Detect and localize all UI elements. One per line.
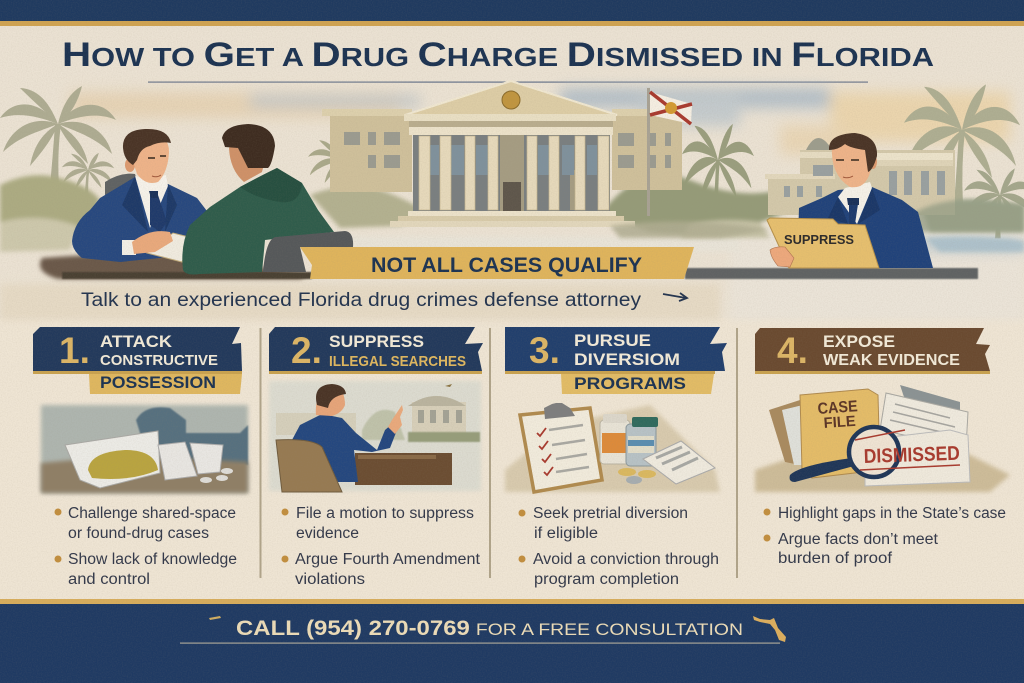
banner: POSSESSION [100,373,216,392]
folder [767,218,879,268]
subheading with arrow: Talk to an experienced Florida drug crimes defense attorney [81,290,642,311]
bullet text: Highlight gaps in the State’s case [778,505,1006,522]
bullet text: evidence [296,525,359,542]
bullet text: or found-drug cases [68,525,209,542]
banner: CONSTRUCTIVE [100,352,218,369]
call to action: CALL (954) 270-0769 FOR A FREE CONSULTATION [236,617,743,640]
bullet text: File a motion to suppress [296,505,474,522]
bullet text: burden of proof [778,550,893,567]
panel 4: expose weak evidence [755,328,1010,567]
banner: ATTACK [100,332,173,351]
banner: WEAK EVIDENCE [823,352,960,369]
banner: 4. [777,330,808,371]
bullet text: Show lack of knowledge [68,551,237,568]
background bushes right [910,199,1024,232]
attorney holding suppress folder [767,133,933,268]
bullet text: Argue Fourth Amendment [295,551,481,568]
illustration: case file and dismissed stamp: CASE [817,398,858,418]
flag [647,88,692,216]
hero scene [0,81,1024,279]
scenery wash [70,88,1024,250]
banner: DIVERSIOM [574,350,680,369]
client hoodie [182,168,334,274]
bullet text [518,505,719,588]
folder label: SUPPRESS [784,232,854,247]
banner: SUPPRESS [329,332,424,351]
banner: 1. [59,330,90,371]
illustration: case file and dismissed stamp [755,385,1010,492]
bullet text [764,505,1006,567]
bullet text: and control [68,571,150,588]
attorney hand and notepad [147,233,193,262]
banner: 2. [291,330,322,371]
bullet text: Avoid a conviction through [533,551,719,568]
portico [413,135,610,211]
ribbon: not all cases qualify: NOT ALL CASES QUALIFY [371,254,642,277]
icon: Florida outline [753,616,786,642]
panel 2: suppress illegal searches [269,327,483,588]
bushes [0,175,1024,252]
banner: ILLEGAL SEARCHES [329,353,466,370]
bullet text: Argue facts don’t meet [778,531,939,548]
bullet text [282,505,481,588]
attorney meeting client [72,124,353,274]
bullet text: violations [295,571,365,588]
illustration: attorney pointing at court [269,381,481,492]
palm trees [0,84,1024,238]
bullet text: Challenge shared-space [68,505,236,522]
top navy band [0,0,1024,26]
ribbon: not all cases qualify [300,247,694,279]
chair back [105,174,140,195]
illustration: checklist and medication [505,403,720,492]
wings [330,110,412,192]
left desk [40,254,308,279]
bullet text [54,505,237,588]
banner [269,327,483,374]
distant capitol [765,138,955,215]
illustration: case file and dismissed stamp: FILE [823,413,856,432]
bullet text: program completion [534,571,679,588]
panel 3: pursue diversion programs [505,327,727,588]
bullet text: if eligible [534,525,598,542]
footer band [0,599,1024,683]
panel 1: attack constructive possession [33,327,248,588]
banner: PURSUE [574,331,651,350]
banner: 3. [529,330,560,371]
banner [755,328,990,374]
bullet text: Seek pretrial diversion [533,505,688,522]
title: HOW TO GET A DRUG CHARGE DISMISSED IN FLORIDA [62,36,934,74]
banner: EXPOSE [823,332,895,351]
attorney head [125,158,135,172]
banner [33,327,242,394]
gray chair [263,231,353,272]
ground wash [610,221,1024,252]
banner: PROGRAMS [574,374,686,393]
illustration: case file and dismissed stamp: DISMISSED [863,443,960,468]
right desk [685,268,978,279]
attorney suit [72,177,210,262]
main courthouse [322,81,684,227]
illustration: seized drug bags [41,405,248,493]
banner [505,327,727,394]
panel dividers [260,328,738,578]
client head [229,130,270,182]
